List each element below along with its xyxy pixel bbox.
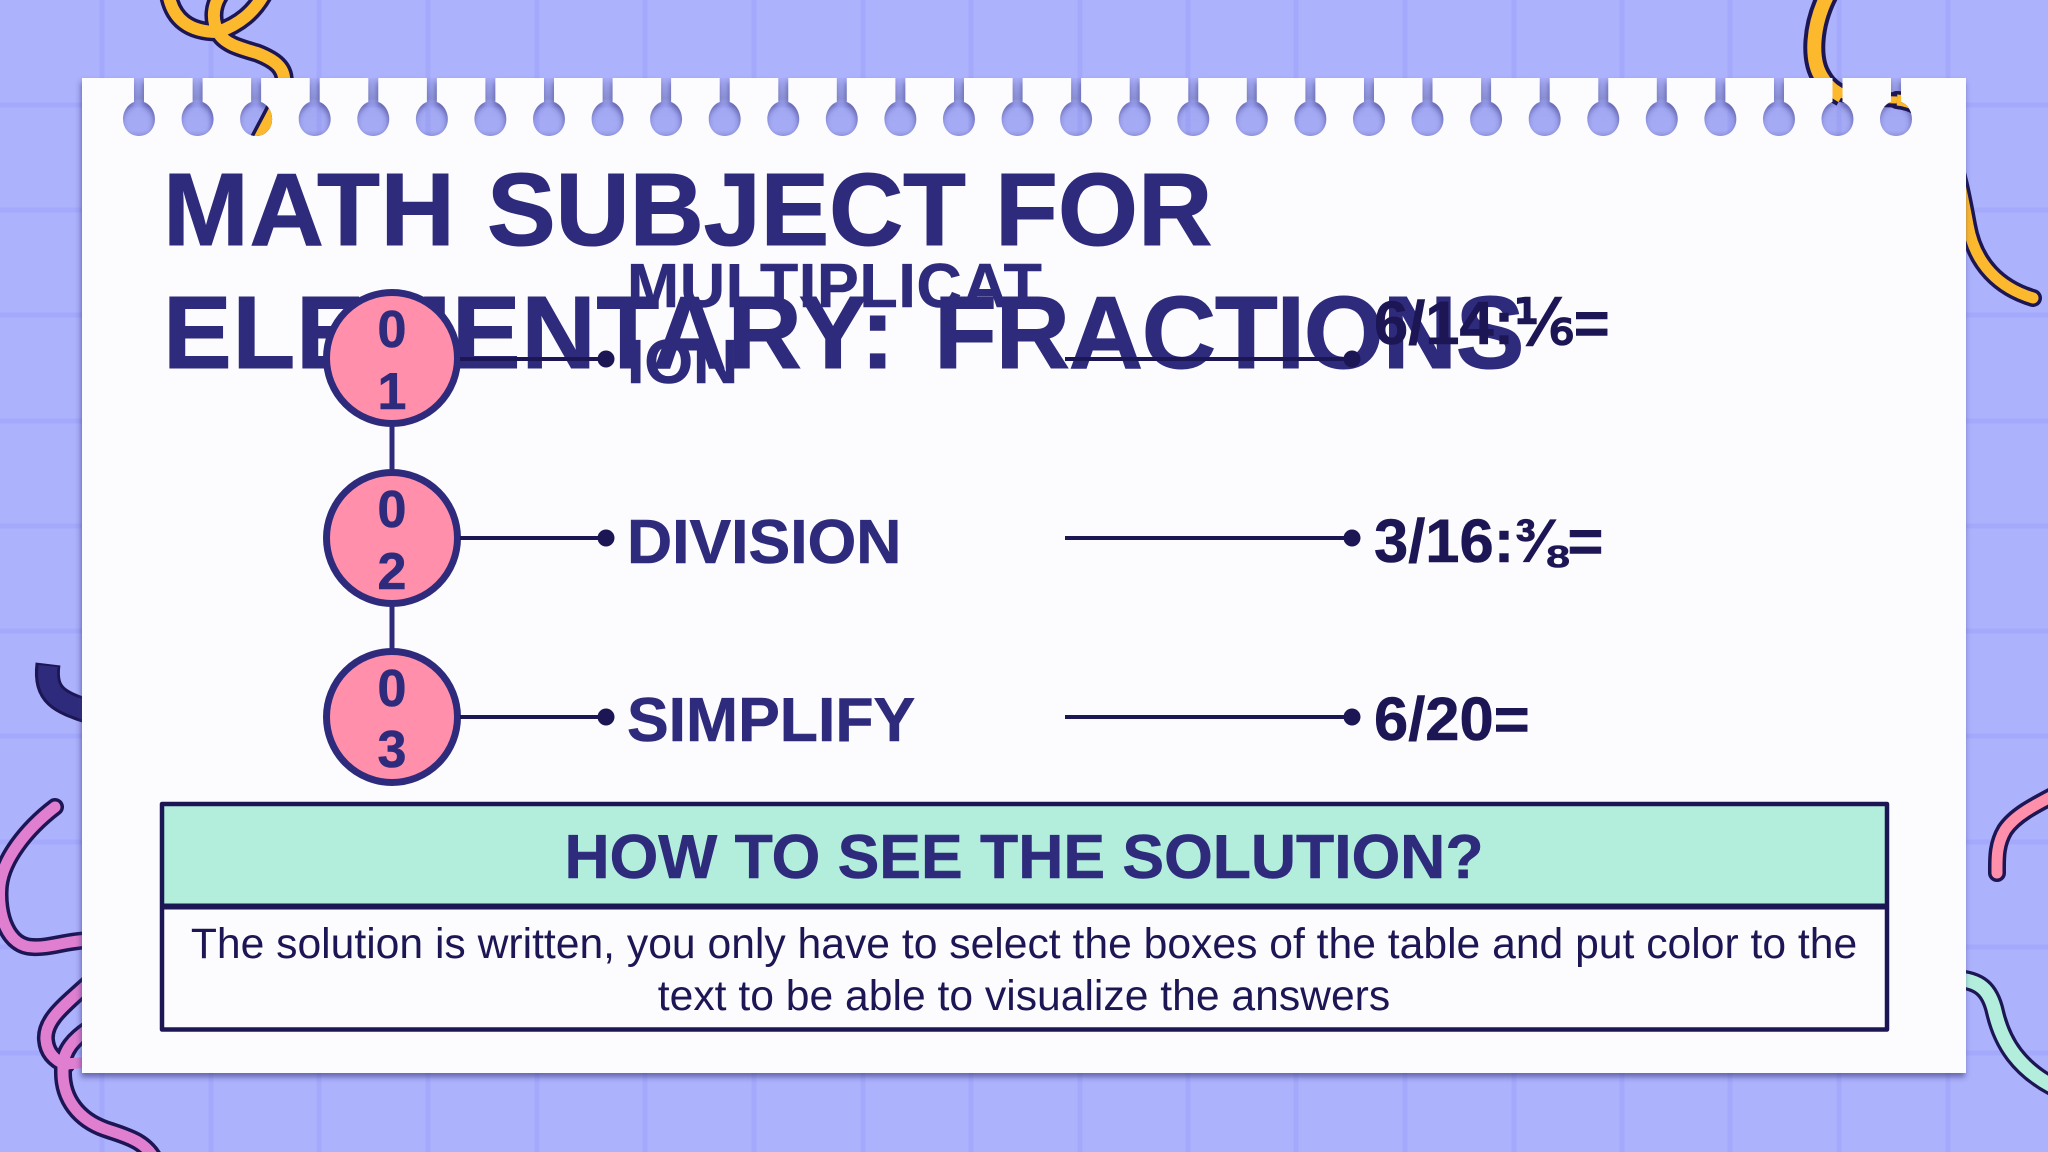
squiggle: navy left <box>47 664 90 712</box>
row 1 <box>326 251 1610 424</box>
number badge 01: 0 <box>378 301 406 359</box>
label: multiplication: ION <box>627 327 738 397</box>
table body text: The solution is written, you only have to select the boxes of the table and put color to the <box>191 920 1857 968</box>
fraction 3: 6/20= <box>1374 685 1530 754</box>
squiggle: yellow top right <box>1814 0 2033 298</box>
label: multiplication: MULTIPLICAT <box>627 251 1043 321</box>
squiggle: yellow top left <box>168 0 284 142</box>
number badge 01 <box>326 292 458 424</box>
label: simplify: SIMPLIFY <box>627 685 915 755</box>
title: SUBJECT <box>487 152 966 267</box>
solution table <box>162 804 1887 1030</box>
row 3 <box>326 652 1530 782</box>
title: MATH <box>163 152 456 267</box>
number badge 02 <box>326 472 458 604</box>
timeline connector <box>390 358 394 717</box>
number badge 03 <box>326 652 458 782</box>
squiggles seen through holes <box>250 78 1912 136</box>
row 2 <box>326 472 1603 604</box>
label: division: DIVISION <box>627 507 901 577</box>
squiggle: teal right <box>1955 979 2048 1090</box>
number badge 02: 0 <box>378 481 406 539</box>
table header: HOW TO SEE THE SOLUTION? <box>564 822 1484 892</box>
paper sheet with punched holes <box>82 78 1966 1073</box>
number badge 02: 2 <box>378 543 406 601</box>
number badge 01: 1 <box>378 363 406 421</box>
squiggle: pink lower left <box>46 982 155 1152</box>
table header <box>162 804 1887 907</box>
fraction 1: 6/14:⅙= <box>1374 289 1610 358</box>
hole shading <box>110 78 1925 138</box>
number badge 03: 3 <box>378 721 406 779</box>
table body text: text to be able to visualize the answers <box>658 972 1390 1020</box>
fraction 2: 3/16:⅜= <box>1374 507 1603 576</box>
number badge 03: 0 <box>378 660 406 718</box>
title: ELEMENTARY: <box>163 275 895 390</box>
squiggle: pink right <box>1997 792 2048 873</box>
title: FRACTIONS <box>934 275 1523 390</box>
title: FOR <box>995 152 1212 267</box>
squiggle: pink left <box>0 807 90 947</box>
